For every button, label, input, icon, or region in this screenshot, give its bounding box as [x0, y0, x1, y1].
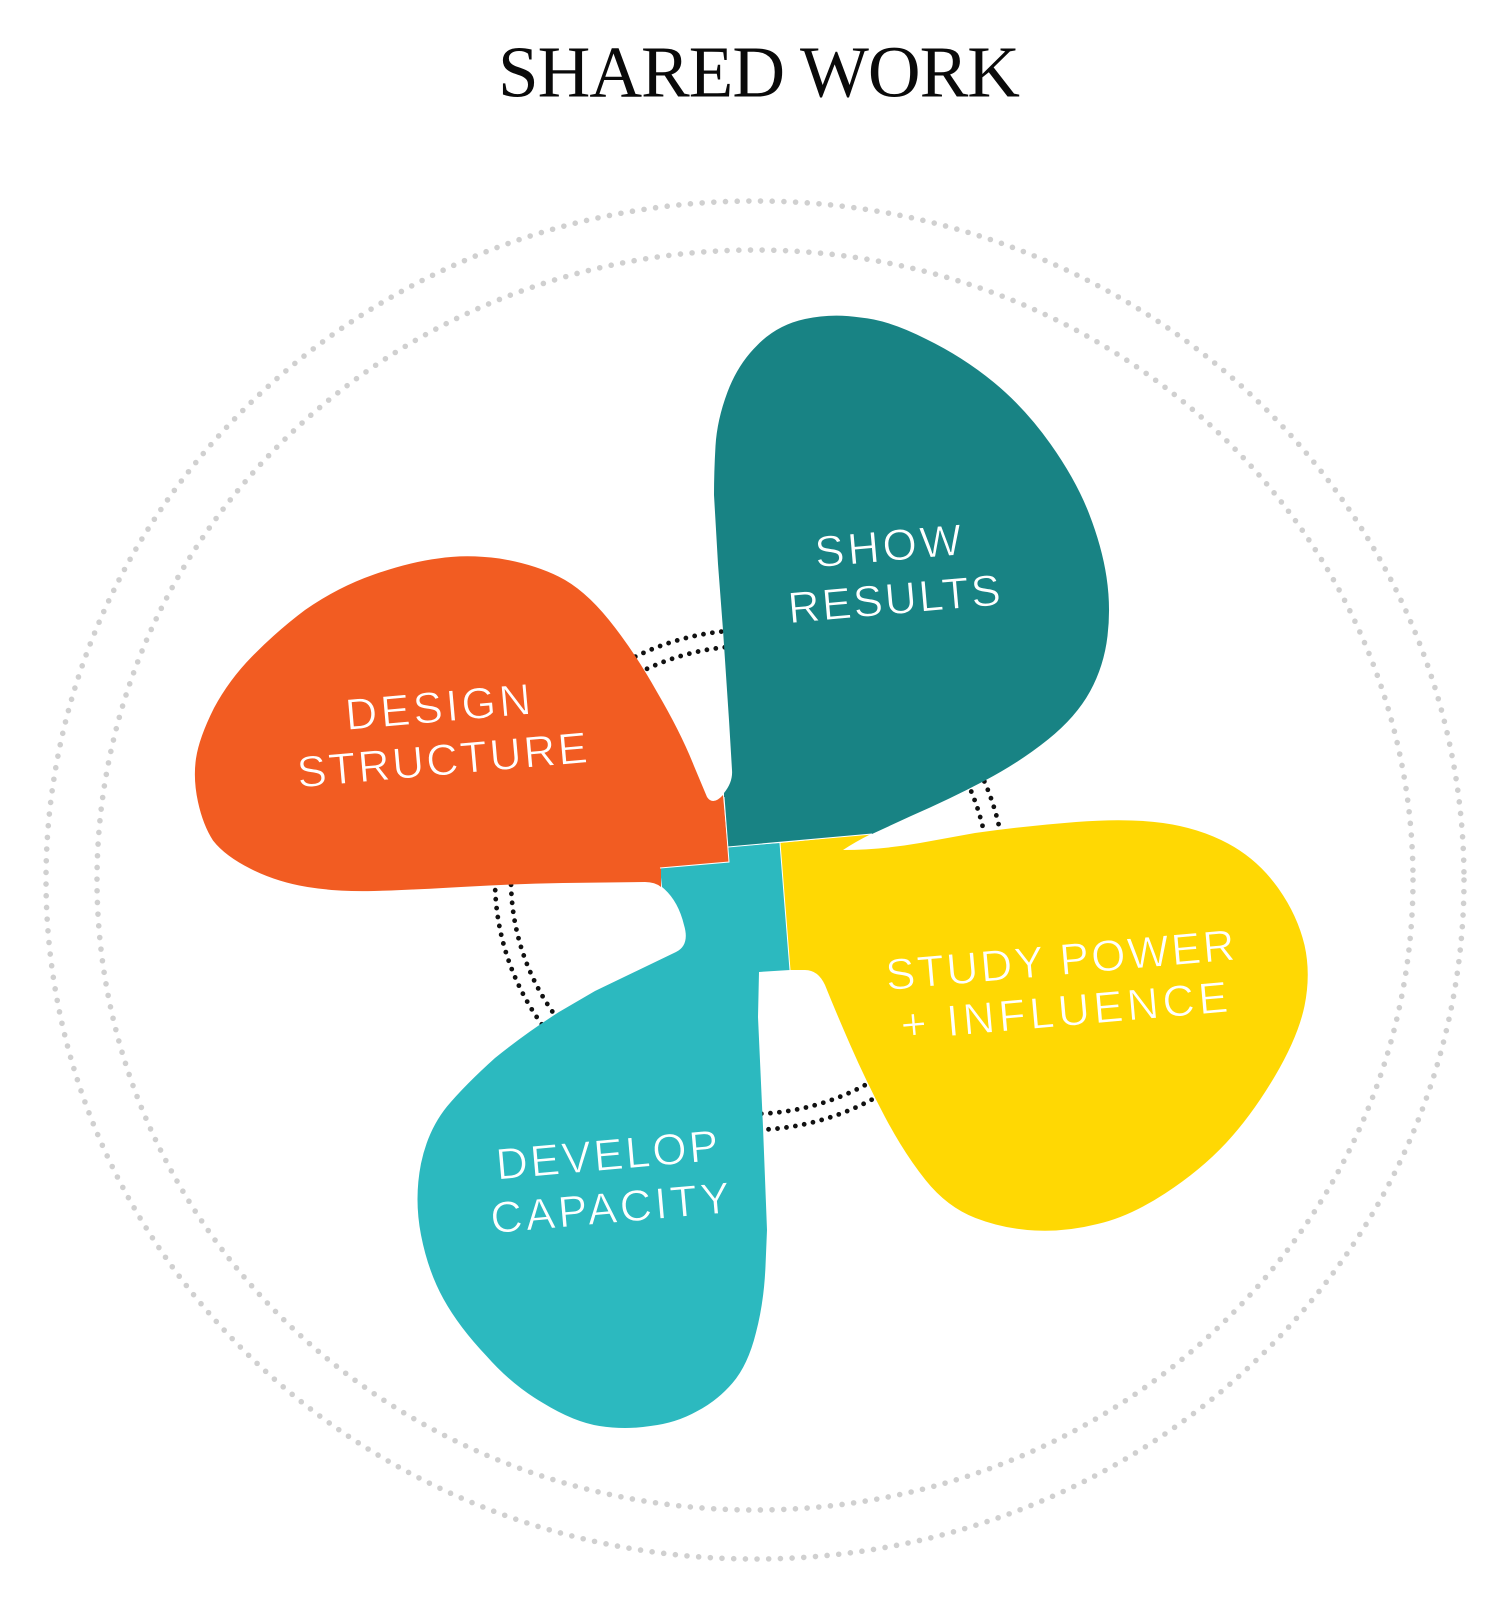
petal: study power + influence	[780, 820, 1308, 1231]
title: SHARED WORK	[498, 32, 1020, 112]
petal: develop capacity	[418, 843, 790, 1428]
label: study power + influence: + INFLUENCE	[899, 973, 1230, 1050]
label: develop capacity: DEVELOP	[494, 1121, 720, 1190]
label: design structure: DESIGN	[343, 675, 533, 740]
label: study power + influence: STUDY POWER	[884, 921, 1237, 1000]
petal: design structure	[195, 556, 729, 891]
label: develop capacity	[488, 1121, 732, 1243]
inner dotted black rings	[495, 630, 1005, 1130]
label: study power + influence	[884, 921, 1237, 1050]
label: design structure	[295, 675, 589, 798]
label: design structure: STRUCTURE	[295, 723, 589, 798]
label: show results: RESULTS	[786, 566, 1002, 633]
petal: show results	[714, 316, 1109, 847]
label: show results	[786, 516, 1002, 633]
label: show results: SHOW	[813, 516, 964, 577]
outer dotted grey rings	[46, 201, 1464, 1559]
label: develop capacity: CAPACITY	[488, 1174, 732, 1243]
center seams	[660, 797, 872, 970]
